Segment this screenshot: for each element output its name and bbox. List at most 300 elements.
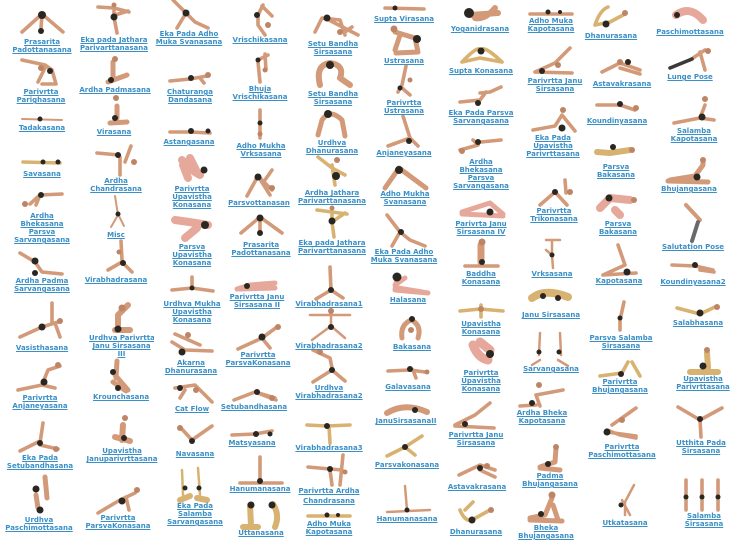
- label: [517, 409, 567, 425]
- label: [306, 520, 352, 536]
- label: [526, 134, 580, 158]
- icon: Parivrtta Janu second: [535, 48, 572, 74]
- label: [685, 512, 723, 528]
- label: Chandrasana: [90, 185, 142, 193]
- label: [172, 185, 212, 209]
- label: Parsva Salamba: [590, 334, 652, 342]
- label: Salamba: [687, 512, 721, 520]
- label: Vrksasana: [531, 270, 573, 278]
- icon: Parivrtta Upavistha second: [473, 342, 494, 360]
- label: Upavistha: [172, 251, 212, 259]
- label: Setubandhasana: [221, 403, 287, 411]
- label: Eka Pada: [177, 502, 213, 510]
- label: Parsva: [468, 174, 494, 182]
- icon: Parivrtta Upavistha: [182, 158, 208, 178]
- label: Adho Mukha: [237, 142, 285, 150]
- label: Parivrtta: [537, 207, 571, 215]
- icon: Upavistha Parivrttasana: [690, 347, 718, 372]
- icon: Supta Konasana: [462, 48, 502, 62]
- icon: Urdhva Paschimottasana: [32, 477, 47, 514]
- label: Parsvakonasana: [375, 461, 439, 469]
- label: Parsvottanasan: [228, 199, 290, 207]
- label: Dhanurasana: [165, 367, 217, 375]
- icon: Lunge Pose: [670, 48, 711, 70]
- label: Utthita Pada: [676, 439, 726, 447]
- icon: Astavakrasana: [459, 463, 495, 477]
- label: [12, 38, 72, 54]
- label: Chandrasana: [303, 497, 355, 505]
- label: [167, 502, 223, 526]
- label: Sarvangasana: [453, 117, 509, 125]
- icon: Cat Flow: [175, 385, 212, 402]
- label: Astavakrasana: [448, 483, 506, 491]
- label: Parivrttasana: [526, 150, 580, 158]
- label: [226, 351, 290, 367]
- label: Sirsasana: [682, 447, 720, 455]
- label: [14, 212, 70, 244]
- icon: Urdhva Dhanurasana: [318, 110, 345, 136]
- label: [518, 524, 574, 540]
- label: Chaturanga: [167, 88, 213, 96]
- icon: JanuSirsasanaII: [387, 407, 427, 413]
- label: Bheka: [534, 524, 558, 532]
- label: Urdhva: [25, 516, 53, 524]
- icon: Upavistha Konasana: [460, 305, 503, 317]
- label: Supta Virasana: [374, 15, 434, 23]
- icon: Sarvangasana: [532, 333, 568, 366]
- label: Eka pada Jathara: [80, 36, 148, 44]
- label: Januparivrttasana: [87, 455, 157, 463]
- label: Sarvangasana: [14, 236, 70, 244]
- label: Paschimottasana: [5, 524, 73, 532]
- label: Bhekasana: [20, 220, 64, 228]
- label: Supta Konasana: [449, 67, 513, 75]
- icon: Virabhadrasana2: [310, 308, 350, 340]
- label: Adho Mukha: [381, 190, 429, 198]
- label: JanuSirsasanaII: [376, 417, 436, 425]
- label: III: [118, 350, 125, 358]
- icon: Adho Muka Kapotasana: [308, 512, 350, 518]
- label: Prasarita: [243, 241, 279, 249]
- label: Astangasana: [164, 138, 214, 146]
- label: Dhanurasana: [450, 528, 502, 536]
- label: [298, 487, 360, 505]
- icon: Vrischikasana: [254, 5, 272, 35]
- label: Bhujangasana: [592, 386, 648, 394]
- label: Padottanasana: [12, 46, 72, 54]
- label: Vrischikasana: [233, 36, 287, 44]
- label: Sarvangasana: [14, 285, 70, 293]
- icon: Salutation Pose: [686, 205, 700, 241]
- icon: Ardha Bheka Kapotasana: [520, 382, 563, 406]
- label: Parivrtta: [605, 443, 639, 451]
- label: [453, 158, 509, 190]
- icon: Adho Mukha Svanasana: [385, 166, 426, 188]
- label: [16, 88, 66, 104]
- icon: Dhanurasana: [460, 502, 494, 524]
- label: Virabhadrasana3: [295, 444, 363, 452]
- label: Padottanasana: [231, 249, 291, 257]
- label: [90, 177, 142, 193]
- icon: Paschimottasana: [674, 11, 703, 20]
- label: Ardha: [30, 212, 54, 220]
- icon: Baddha Konasana: [465, 238, 498, 266]
- icon: Setu Bandha one: [315, 14, 358, 35]
- label: Yoganidrasana: [451, 25, 509, 33]
- label: Ardha Bheka: [517, 409, 567, 417]
- icon: Parsvottanasan: [247, 170, 275, 196]
- label: [676, 439, 726, 455]
- icon: Utthita Pada: [678, 407, 722, 437]
- icon: Chaturanga: [170, 72, 211, 83]
- label: Vrksasana: [240, 150, 282, 158]
- label: Prasarita: [24, 38, 60, 46]
- label: [461, 369, 501, 393]
- label: Sarvangasana: [453, 182, 509, 190]
- label: [384, 99, 424, 115]
- label: Ustrasana: [384, 57, 424, 65]
- label: Parivrtta: [464, 369, 498, 377]
- icon: Parsva Salamba: [618, 302, 624, 330]
- icon: Parivrtta Parsva: [238, 324, 281, 349]
- label: Parivrtta Ardha: [299, 487, 359, 495]
- label: Sirsasana: [314, 98, 352, 106]
- icon: Utkatasana: [618, 485, 634, 515]
- label: Parivrtta: [101, 514, 135, 522]
- label: ParsvaKonasana: [86, 522, 150, 530]
- label: Bhekasana: [459, 166, 503, 174]
- icon: Kapotasana: [603, 245, 636, 276]
- label: Virabhadrasana2: [295, 392, 363, 400]
- icon: Eka Pada Setubandhasana: [20, 423, 59, 452]
- icon: Parivrtta Janu II: [237, 283, 275, 289]
- label: Upavistha: [461, 320, 501, 328]
- icon: Vrksasana: [546, 240, 560, 268]
- label: Sarvangasana: [523, 365, 579, 373]
- icon: Setubandhasana: [234, 389, 276, 401]
- icon: Urdhva Parivrtta: [114, 304, 130, 332]
- label: [14, 277, 70, 293]
- icon: Eka Pada Salamba: [180, 468, 207, 500]
- icon: Parivrtta Parighasana: [22, 60, 56, 84]
- label: Matsyasana: [228, 439, 276, 447]
- label: Sirsasana: [457, 439, 495, 447]
- label: [89, 334, 154, 358]
- label: Eka Pada Parsva: [448, 109, 514, 117]
- label: ParsvaKonasana: [226, 359, 290, 367]
- icon: Salamba Sirsasana: [684, 480, 720, 510]
- label: Dandasana: [168, 96, 212, 104]
- label: Upavistha: [683, 375, 723, 383]
- label: Baddha: [466, 270, 496, 278]
- label: [522, 472, 578, 488]
- icon: Misc: [111, 196, 124, 227]
- label: Ustrasana: [384, 107, 424, 115]
- label: Anjaneyasana: [12, 402, 68, 410]
- label: Bhujangasana: [661, 185, 717, 193]
- label: [592, 378, 648, 394]
- icon: Parsva Bakasana one: [597, 144, 635, 153]
- icon: Anjaneyasana: [388, 116, 418, 146]
- label: Parsva: [603, 163, 629, 171]
- label: Kapotasana: [596, 277, 642, 285]
- icon: Adho Muka second: [530, 10, 572, 14]
- label: Krounchasana: [93, 393, 149, 401]
- label: Parivarttanasana: [298, 197, 366, 205]
- label: Halasana: [390, 296, 426, 304]
- label: Muka Svanasana: [156, 38, 222, 46]
- label: Tadakasana: [19, 124, 65, 132]
- label: Konasana: [462, 385, 500, 393]
- label: Paschimottasana: [656, 28, 724, 36]
- label: Sirsasana: [602, 342, 640, 350]
- icon: Astavakrasana second: [602, 59, 640, 74]
- label: Uttanasana: [238, 529, 284, 537]
- label: Parivrta Janu: [455, 220, 507, 228]
- icon: Padma Bhujangasana: [540, 444, 560, 470]
- label: [298, 239, 366, 255]
- label: Parsva: [29, 228, 55, 236]
- label: [671, 127, 717, 143]
- label: Lunge Pose: [667, 73, 713, 81]
- label: Svanasana: [384, 198, 426, 206]
- label: Urdhva Mukha: [163, 300, 221, 308]
- label: Ardha: [469, 158, 493, 166]
- icon: Eka pada Jathara second: [317, 206, 347, 237]
- icon: Janu Sirsasana: [532, 293, 568, 301]
- label: [380, 190, 430, 206]
- label: [166, 88, 214, 104]
- label: Ardha: [104, 177, 128, 185]
- icon: Bheka Bhujangasana: [530, 492, 562, 521]
- label: Kapotasana: [528, 25, 574, 33]
- icon: Urdhva Mukha Upavistha: [172, 277, 213, 291]
- icon: Yoganidrasana: [464, 8, 498, 18]
- icon: Eka Pada Parsva: [460, 87, 501, 106]
- icon: Halasana: [392, 272, 428, 293]
- label: [462, 270, 500, 286]
- label: [370, 248, 438, 264]
- label: Setu Bandha: [308, 40, 358, 48]
- icon: Krounchasana: [110, 361, 128, 391]
- label: Savasana: [23, 170, 61, 178]
- label: Parsva: [179, 243, 205, 251]
- label: [164, 359, 218, 375]
- label: Konasana: [173, 201, 211, 209]
- label: Sirsasana IV: [457, 228, 505, 236]
- label: Sirsasana: [536, 85, 574, 93]
- label: Ardha Padmasana: [79, 86, 151, 94]
- label: Konasana: [173, 316, 211, 324]
- icon: Bhujangasana: [668, 157, 708, 182]
- label: Dhanurasana: [585, 32, 637, 40]
- label: Sirsasana: [685, 520, 723, 528]
- label: Parivrtta: [175, 185, 209, 193]
- icon: Parivrtta Trikonasana: [540, 180, 573, 205]
- icon: Ardha Padma: [20, 253, 62, 276]
- label: Trikonasana: [530, 215, 578, 223]
- label: [461, 320, 501, 336]
- label: Salamba: [178, 510, 212, 518]
- icon: Parivrtta Janu Sirsasana: [455, 403, 494, 428]
- icon: Parsva Upavistha: [175, 220, 209, 238]
- label: Urdhva: [315, 384, 343, 392]
- label: [599, 220, 637, 236]
- label: Konasana: [462, 328, 500, 336]
- label: Virabhadrasana1: [295, 300, 363, 308]
- label: Bhujangasana: [518, 532, 574, 540]
- label: Muka Svanasana: [371, 256, 437, 264]
- label: Parivarttanasana: [298, 247, 366, 255]
- label: Eka Pada Adho: [375, 248, 433, 256]
- icon: Dhanurasana second: [595, 7, 628, 28]
- icon: Savasana: [23, 160, 60, 164]
- label: Koundinyasana: [587, 117, 647, 125]
- label: Parsva: [605, 220, 631, 228]
- icon: Ardha Bhekasana: [22, 192, 62, 207]
- label: Adho Muka: [307, 520, 351, 528]
- icon: Galavasana: [388, 366, 430, 378]
- icon: Astangasana: [170, 128, 210, 134]
- label: [231, 241, 291, 257]
- label: Bakasana: [599, 228, 637, 236]
- label: Salabhasana: [673, 319, 723, 327]
- label: Bakasana: [393, 343, 431, 351]
- label: [232, 85, 288, 101]
- label: [528, 17, 574, 33]
- label: Vrischikasana: [233, 93, 287, 101]
- icon: Parivrtta Anjaneyasana: [18, 362, 61, 390]
- icon: Ardha Chandrasana: [97, 146, 137, 175]
- label: Sarvangasana: [167, 518, 223, 526]
- label: Astavakrasana: [593, 80, 651, 88]
- label: Parivrttasana: [676, 383, 730, 391]
- label: Misc: [107, 231, 125, 239]
- label: Parivrtta: [603, 378, 637, 386]
- label: Bhujangasana: [522, 480, 578, 488]
- label: Konasana: [173, 259, 211, 267]
- icon: Supta Virasana: [385, 6, 424, 10]
- label: Hanumanasana: [377, 515, 437, 523]
- icon: Eka Pada Adho Muka: [173, 0, 208, 28]
- label: [298, 189, 366, 205]
- label: Virabhadrasana2: [295, 342, 363, 350]
- icon: Eka pada Jathara: [98, 2, 129, 33]
- label: [163, 300, 221, 324]
- label: Setu Bandha: [308, 90, 358, 98]
- label: [230, 293, 284, 309]
- label: Akarna: [177, 359, 205, 367]
- label: [295, 384, 363, 400]
- label: Upavistha: [102, 447, 142, 455]
- label: Virabhadrasana: [85, 276, 147, 284]
- label: Adho Muka: [529, 17, 573, 25]
- label: [308, 40, 358, 56]
- label: Galavasana: [385, 383, 431, 391]
- label: [86, 447, 158, 463]
- label: Setubandhasana: [7, 462, 73, 470]
- label: Urdhva: [318, 139, 346, 147]
- label: [172, 243, 212, 267]
- label: Upavistha: [461, 377, 501, 385]
- icon: Ustrasana: [390, 26, 421, 53]
- label: Janu Sirsasana: [92, 342, 151, 350]
- label: Parighasana: [17, 96, 65, 104]
- label: Cat Flow: [175, 405, 209, 413]
- label: Koundinyasana2: [660, 278, 726, 286]
- label: Vasisthasana: [16, 344, 68, 352]
- icon: Hanumanasana: [240, 457, 282, 484]
- label: Bakasana: [597, 171, 635, 179]
- label: [236, 142, 286, 158]
- icon: Hanumanasana second: [387, 486, 430, 512]
- label: Hanumanasana: [230, 485, 290, 493]
- icon: Koundinyasana2: [672, 262, 714, 272]
- label: Eka Pada: [535, 134, 571, 142]
- label: Salutation Pose: [662, 243, 724, 251]
- label: Eka Pada Adho: [160, 30, 218, 38]
- label: Parivrtta: [24, 88, 58, 96]
- icon: Prasarita Padottanasana: [22, 11, 63, 34]
- label: [676, 375, 730, 391]
- label: Salamba: [677, 127, 711, 135]
- icon: Prasarita second: [241, 214, 282, 236]
- label: Parivrtta: [241, 351, 275, 359]
- icon: Akarna Dhanurasana: [172, 332, 212, 356]
- label: Upavistha: [533, 142, 573, 150]
- icon: Adho Mukha Vrksasana: [258, 110, 262, 138]
- icon: Eka Pada Adho second: [387, 215, 425, 246]
- label: Kapotasana: [671, 135, 717, 143]
- icon: Salabhasana: [677, 304, 720, 316]
- icon: Parivrtta Ustrasana: [398, 66, 412, 95]
- label: Navasana: [176, 450, 214, 458]
- label: Kapotasana: [519, 417, 565, 425]
- icon: Urdhva Virabhadrasana2: [313, 349, 345, 382]
- icon: Uttanasana: [243, 502, 277, 527]
- label: [449, 431, 503, 447]
- icon: Matsyasana: [232, 431, 272, 437]
- label: [12, 394, 68, 410]
- icon: Parsva Bakasana two: [600, 194, 637, 215]
- icon: Ardha Bheka Parsva: [459, 139, 501, 154]
- label: Ardha Padma: [16, 277, 68, 285]
- icon: Parsvakonasana: [387, 436, 422, 456]
- label: Anjaneyasana: [376, 149, 432, 157]
- icon: Bhuja Vrischikasana: [256, 54, 268, 82]
- label: Utkatasana: [602, 519, 648, 527]
- icon: Parivrta Janu IV: [462, 203, 503, 216]
- label: [308, 90, 358, 106]
- icon: Virabhadrasana1: [316, 267, 343, 299]
- label: Eka Pada: [22, 454, 58, 462]
- icon: Parivrtta Paschimottasana: [604, 408, 636, 438]
- label: Upavistha: [172, 193, 212, 201]
- icon: Ardha Jathara: [318, 157, 345, 185]
- icon: Vasisthasana: [20, 303, 63, 337]
- label: Eka pada Jathara: [298, 239, 366, 247]
- label: Parivrtta Janu: [528, 77, 582, 85]
- icon: Ardha Padmasana: [108, 56, 127, 83]
- label: [306, 139, 358, 155]
- label: [156, 30, 222, 46]
- label: Bhuja: [249, 85, 271, 93]
- label: [528, 77, 582, 93]
- label: Virasana: [97, 128, 131, 136]
- icon: Tadakasana: [22, 116, 62, 122]
- label: Konasana: [462, 278, 500, 286]
- icon: Bakasana: [402, 316, 419, 338]
